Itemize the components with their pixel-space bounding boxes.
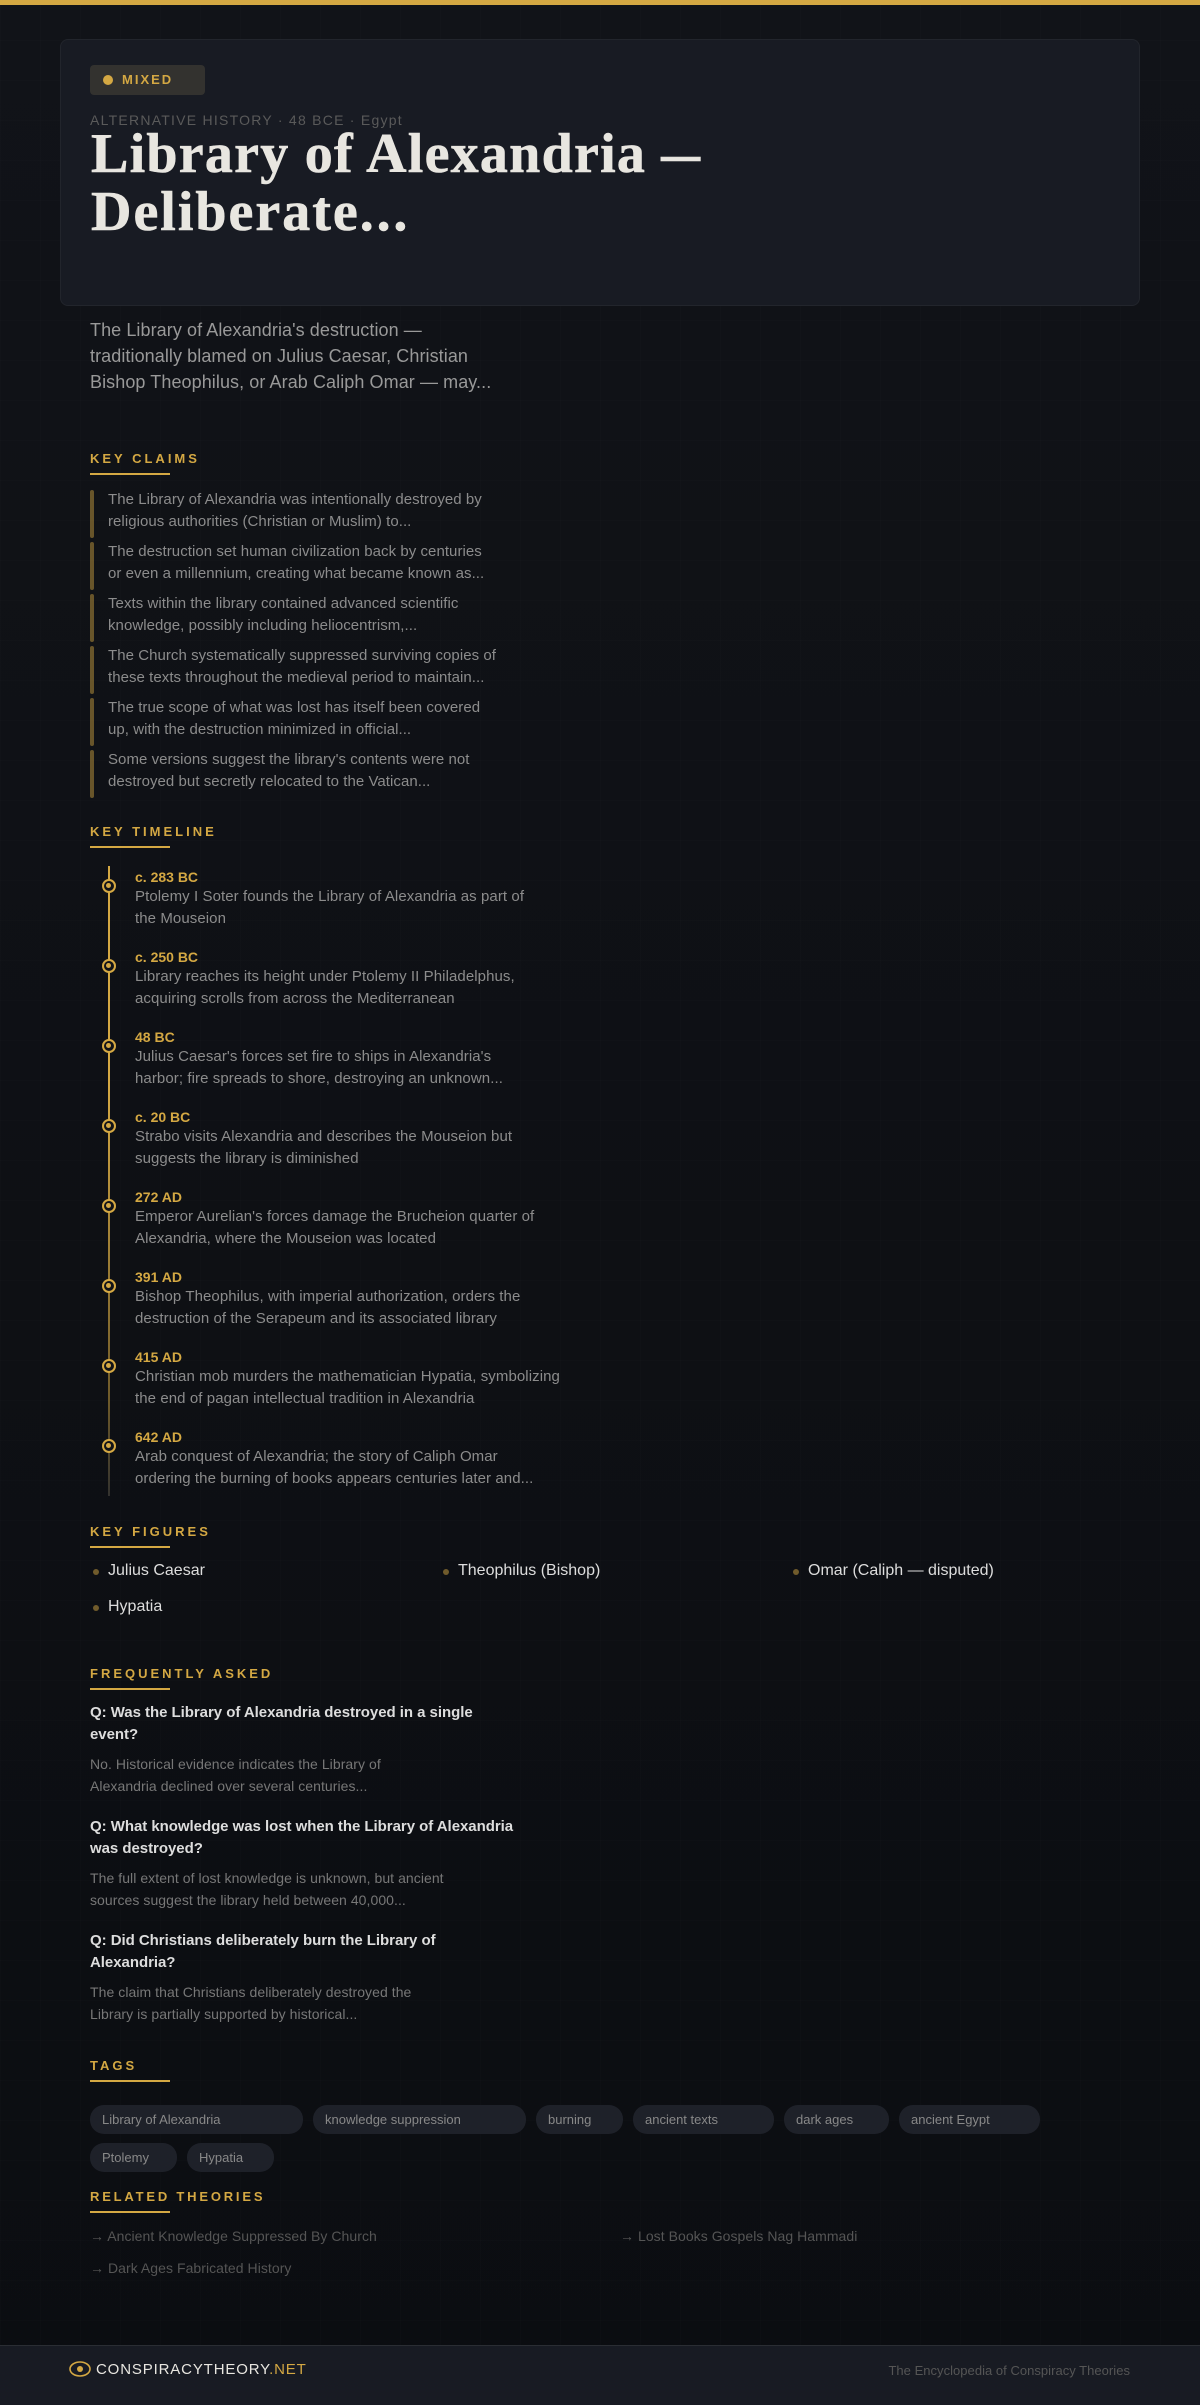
claim 3: knowledge, possibly including heliocentrism,... <box>108 617 417 634</box>
faq 2: sources suggest the library held between 40,000... <box>90 1892 406 1908</box>
faq 1 <box>90 1704 473 1794</box>
heading: related theories: RELATED THEORIES <box>90 2189 265 2204</box>
claim 2 <box>90 542 484 590</box>
event 415 AD: Christian mob murders the mathematician Hypatia, symbolizing <box>135 1368 560 1385</box>
title: Library of Alexandria <box>91 123 646 185</box>
hero panel <box>60 39 1140 306</box>
event 272 AD: Alexandria, where the Mouseion was located <box>135 1230 436 1247</box>
section: tags <box>90 2058 1040 2172</box>
title <box>91 123 701 243</box>
event c. 20 BC: Strabo visits Alexandria and describes the Mouseion but <box>135 1128 512 1145</box>
logo <box>69 2361 307 2378</box>
verdict badge: mixed <box>90 65 205 95</box>
event c. 283 BC: Ptolemy I Soter founds the Library of Alexandria as part of <box>135 888 524 905</box>
event 48 BC <box>102 1029 503 1087</box>
event 642 AD <box>102 1429 533 1487</box>
section: key claims <box>90 451 496 798</box>
section: related theories <box>90 2189 857 2276</box>
tag: Library of Alexandria <box>102 2112 221 2127</box>
faq 1: No. Historical evidence indicates the Library of <box>90 1756 381 1772</box>
event 391 AD: 391 AD <box>135 1269 182 1285</box>
event 415 AD <box>102 1349 560 1407</box>
intro paragraph: traditionally blamed on Julius Caesar, Christian <box>90 346 468 366</box>
claim 5 <box>90 698 480 746</box>
tag <box>899 2105 1040 2134</box>
event 48 BC: Julius Caesar's forces set fire to ships in Alexandria's <box>135 1048 491 1065</box>
event c. 283 BC <box>102 869 524 927</box>
claim 5: The true scope of what was lost has itself been covered <box>108 699 480 716</box>
timeline spine <box>108 866 110 1496</box>
heading: tags: TAGS <box>90 2058 137 2073</box>
event c. 20 BC: suggests the library is diminished <box>135 1150 359 1167</box>
event 48 BC: 48 BC <box>135 1029 175 1045</box>
title: — <box>661 123 701 185</box>
tag: burning <box>548 2112 591 2127</box>
event c. 283 BC: c. 283 BC <box>135 869 198 885</box>
faq 3 <box>90 1932 436 2022</box>
event c. 250 BC: acquiring scrolls from across the Mediterranean <box>135 990 455 1007</box>
icon: eye <box>69 2361 91 2377</box>
claim 2: or even a millennium, creating what became known as... <box>108 565 484 582</box>
event c. 20 BC: c. 20 BC <box>135 1109 190 1125</box>
tag: ancient texts <box>645 2112 718 2127</box>
faq 3: Library is partially supported by historical... <box>90 2006 357 2022</box>
badge label: MIXED <box>122 72 173 87</box>
tag: Hypatia <box>199 2150 243 2165</box>
event 272 AD <box>102 1189 534 1247</box>
intro paragraph: Bishop Theophilus, or Arab Caliph Omar — may... <box>90 372 491 392</box>
intro paragraph <box>90 320 491 392</box>
faq 2: was destroyed? <box>90 1840 203 1857</box>
event 391 AD: Bishop Theophilus, with imperial authorization, orders the <box>135 1288 520 1305</box>
tag: knowledge suppression <box>325 2112 461 2127</box>
tag <box>187 2143 274 2172</box>
event c. 250 BC <box>102 949 515 1007</box>
heading: key figures: KEY FIGURES <box>90 1524 211 1539</box>
claim 6: Some versions suggest the library's contents were not <box>108 751 470 768</box>
claim 2: The destruction set human civilization back by centuries <box>108 543 482 560</box>
faq 2: Q: What knowledge was lost when the Library of Alexandria <box>90 1818 513 1835</box>
event c. 20 BC <box>102 1109 512 1167</box>
figure: Julius Caesar: Julius Caesar <box>108 1562 205 1579</box>
claim 6 <box>90 750 470 798</box>
tag <box>313 2105 526 2134</box>
claim 4: The Church systematically suppressed surviving copies of <box>108 647 496 664</box>
faq 1: Alexandria declined over several centuries... <box>90 1778 367 1794</box>
figure: Hypatia: Hypatia <box>108 1598 162 1615</box>
wordmark: CONSPIRACYTHEORY.NET <box>96 2361 307 2378</box>
claim 6: destroyed but secretly relocated to the Vatican... <box>108 773 430 790</box>
faq 1: Q: Was the Library of Alexandria destroyed in a single <box>90 1704 473 1721</box>
faq 2: The full extent of lost knowledge is unknown, but ancient <box>90 1870 444 1886</box>
claim 5: up, with the destruction minimized in official... <box>108 721 411 738</box>
figure: Theophilus: Theophilus (Bishop) <box>458 1562 600 1579</box>
section: frequently asked <box>90 1666 514 2022</box>
title: Deliberate... <box>91 181 410 243</box>
claim 1: religious authorities (Christian or Muslim) to... <box>108 513 411 530</box>
badge dot <box>103 75 113 85</box>
event 415 AD: 415 AD <box>135 1349 182 1365</box>
claim 3: Texts within the library contained advanced scientific <box>108 595 458 612</box>
section: key figures <box>90 1524 994 1615</box>
top accent bar <box>0 0 1200 5</box>
faq 2 <box>90 1818 514 1908</box>
intro paragraph: The Library of Alexandria's destruction — <box>90 320 422 340</box>
tag <box>90 2105 303 2134</box>
claim 4: these texts throughout the medieval period to maintain... <box>108 669 484 686</box>
tag: dark ages <box>796 2112 853 2127</box>
heading: key claims: KEY CLAIMS <box>90 451 200 466</box>
heading: key timeline: KEY TIMELINE <box>90 824 217 839</box>
event 642 AD: Arab conquest of Alexandria; the story of Caliph Omar <box>135 1448 498 1465</box>
faq 3: The claim that Christians deliberately destroyed the <box>90 1984 411 2000</box>
event c. 250 BC: c. 250 BC <box>135 949 198 965</box>
faq 3: Alexandria? <box>90 1954 175 1971</box>
event c. 283 BC: the Mouseion <box>135 910 226 927</box>
event 391 AD <box>102 1269 520 1327</box>
footer tagline: The Encyclopedia of Conspiracy Theories <box>888 2363 1130 2378</box>
timeline <box>102 866 560 1496</box>
tag: Ptolemy <box>102 2150 149 2165</box>
event 642 AD: 642 AD <box>135 1429 182 1445</box>
event 48 BC: harbor; fire spreads to shore, destroying an unknown... <box>135 1070 503 1087</box>
event 272 AD: 272 AD <box>135 1189 182 1205</box>
event 391 AD: destruction of the Serapeum and its associated library <box>135 1310 497 1327</box>
category and date line: ALTERNATIVE HISTORY · 48 BCE · Egypt <box>90 112 403 128</box>
event c. 250 BC: Library reaches its height under Ptolemy II Philadelphus, <box>135 968 515 985</box>
figure: Omar: Omar (Caliph — disputed) <box>808 1562 994 1579</box>
claim 1: The Library of Alexandria was intentionally destroyed by <box>108 491 482 508</box>
event 415 AD: the end of pagan intellectual tradition in Alexandria <box>135 1390 474 1407</box>
claim 1 <box>90 490 482 538</box>
tag <box>536 2105 623 2134</box>
related link 2: → Lost Books Gospels Nag Hammadi <box>620 2228 857 2244</box>
related link 1: → Ancient Knowledge Suppressed By Church <box>90 2228 377 2244</box>
claim 4 <box>90 646 496 694</box>
tag <box>90 2143 177 2172</box>
related link 3: → Dark Ages Fabricated History <box>90 2260 291 2276</box>
claim 3 <box>90 594 458 642</box>
tag: ancient Egypt <box>911 2112 990 2127</box>
footer <box>0 2345 1200 2405</box>
heading: frequently asked: FREQUENTLY ASKED <box>90 1666 273 1681</box>
tag <box>633 2105 774 2134</box>
faq 3: Q: Did Christians deliberately burn the Library of <box>90 1932 436 1949</box>
tag <box>784 2105 889 2134</box>
faq 1: event? <box>90 1726 138 1743</box>
event 272 AD: Emperor Aurelian's forces damage the Brucheion quarter of <box>135 1208 534 1225</box>
event 642 AD: ordering the burning of books appears centuries later and... <box>135 1470 533 1487</box>
